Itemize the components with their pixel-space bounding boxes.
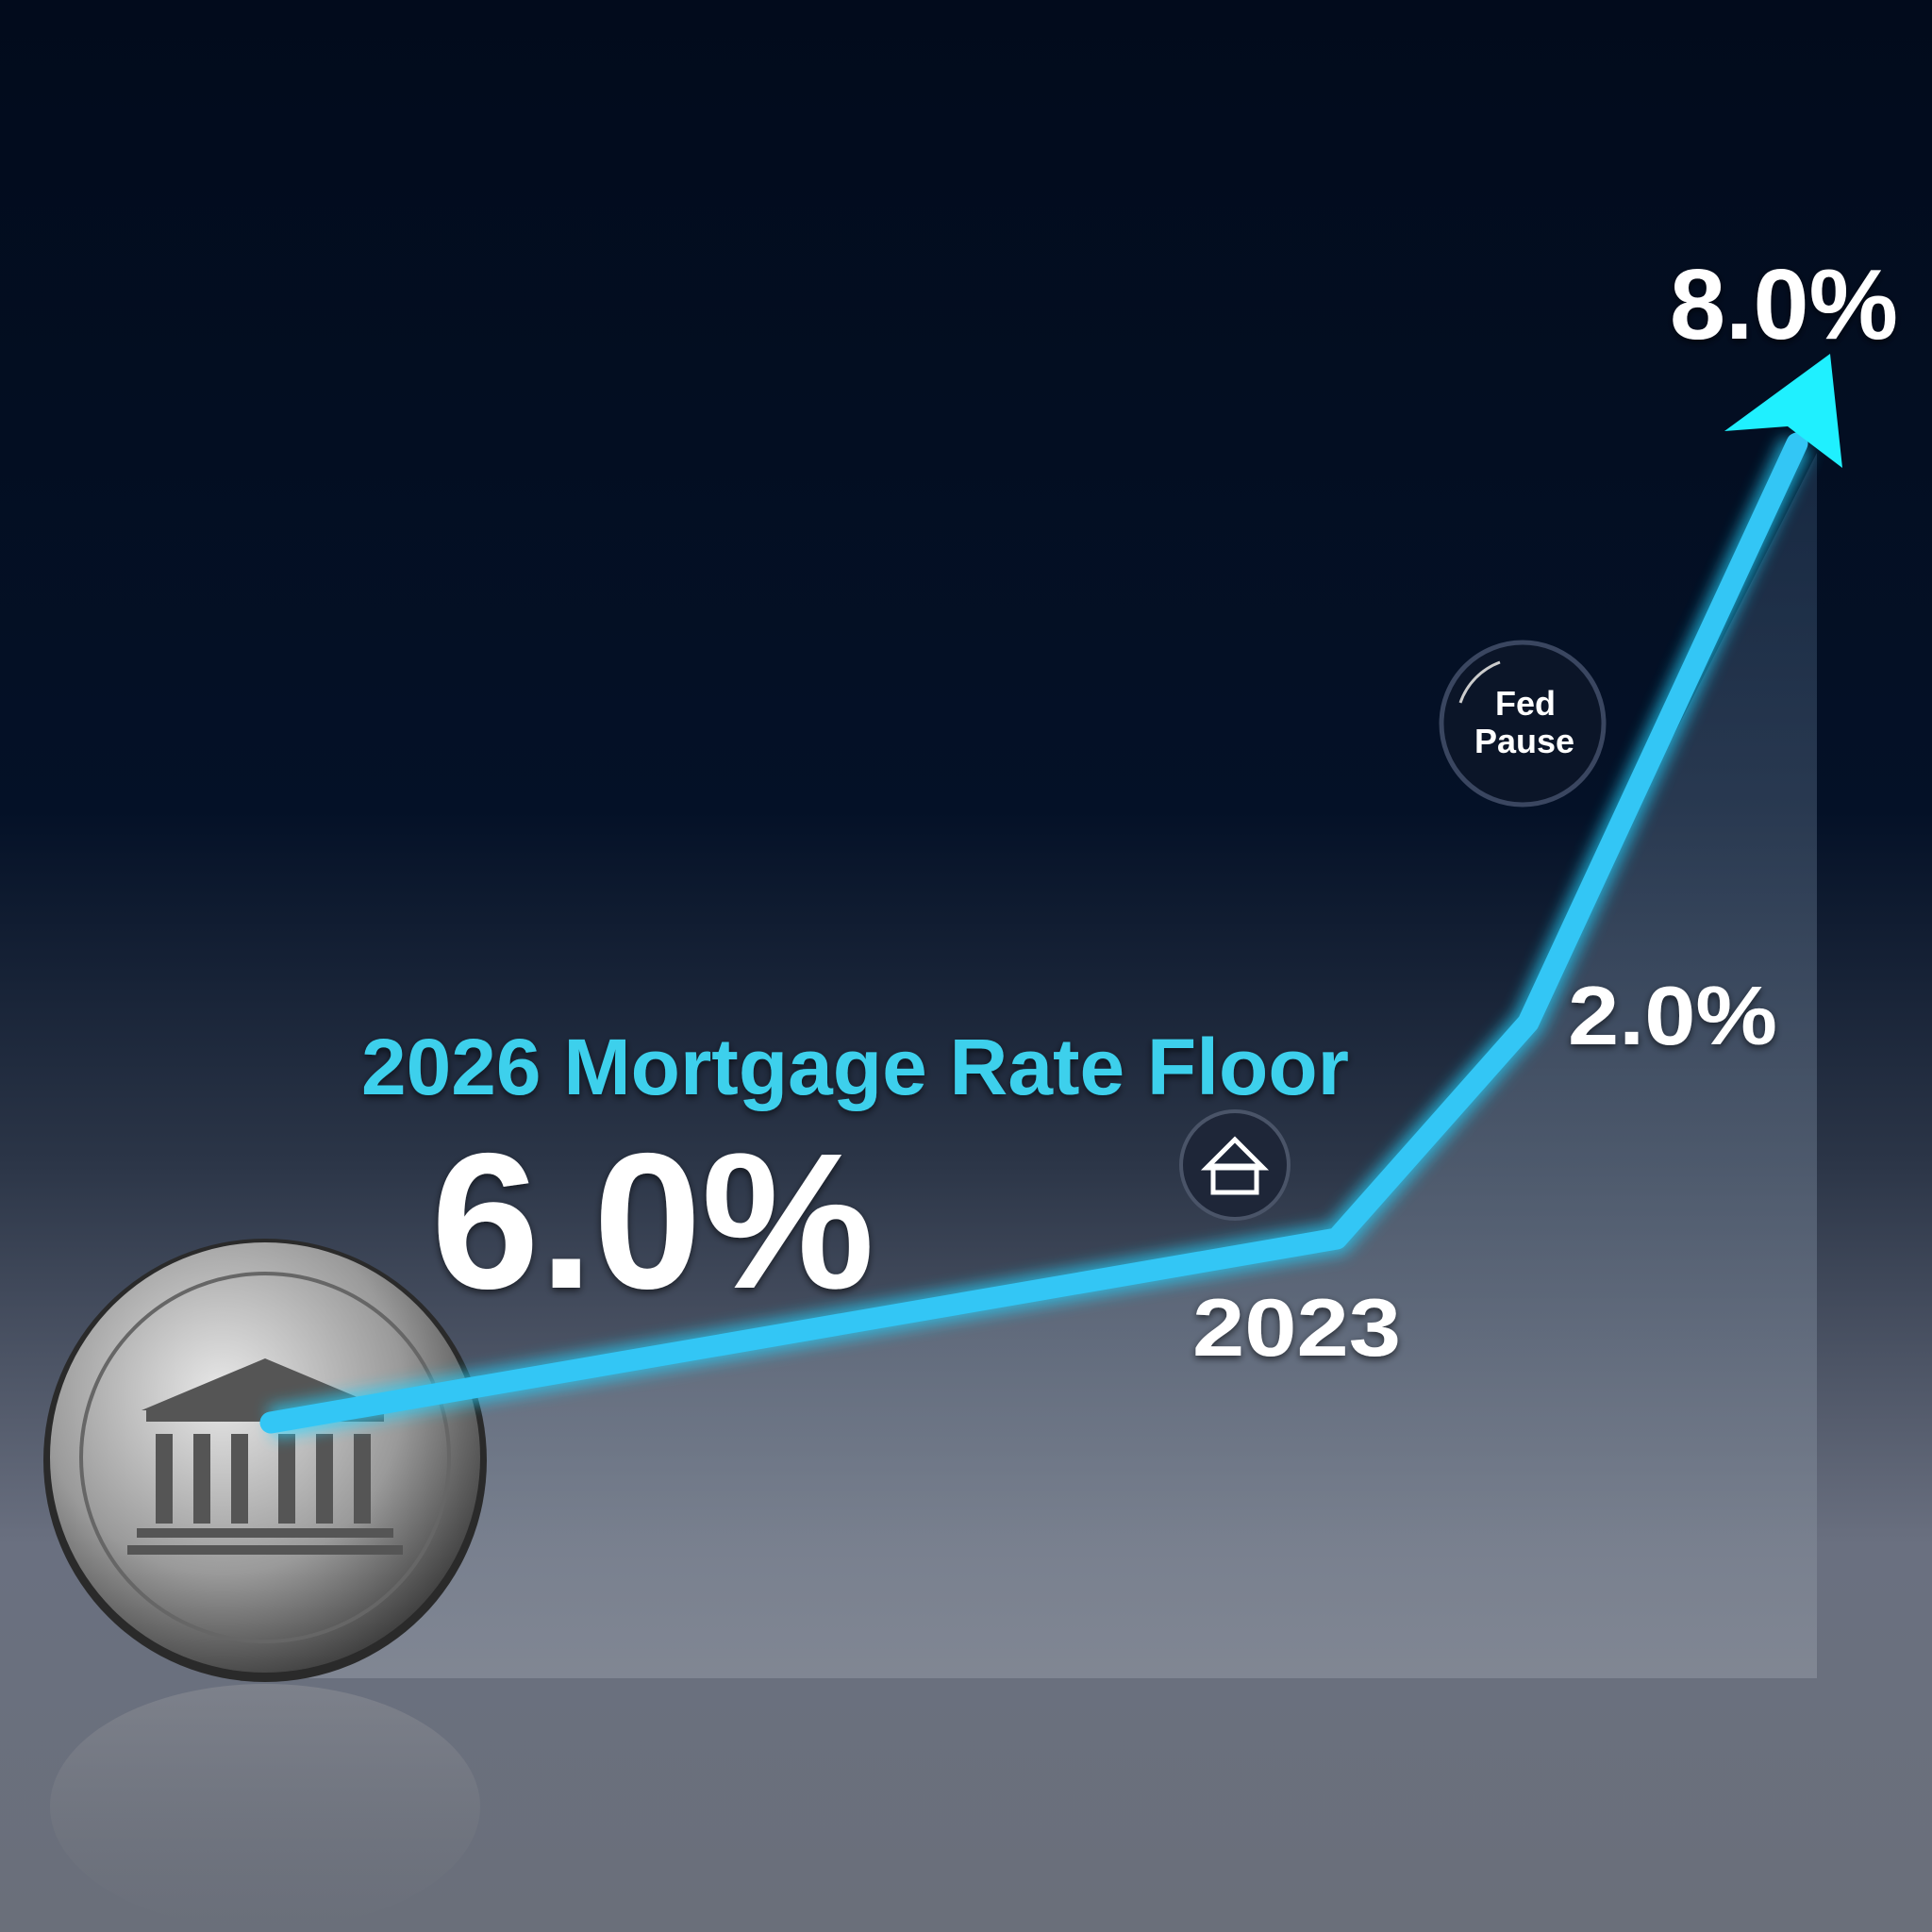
2023 label: 2023 (1192, 1283, 1401, 1374)
icon: fed pause badge (1441, 642, 1604, 805)
icon: house (1181, 1111, 1289, 1219)
title: 2026 Mortgage Rate Floor (361, 1023, 1349, 1111)
6.0% value: 6.0% (431, 1113, 874, 1329)
icon: fed pause badge: Fed (1495, 684, 1556, 723)
arrow head (1724, 354, 1842, 468)
8.0% label: 8.0% (1670, 249, 1898, 360)
icon: fed pause badge: Pause (1474, 722, 1574, 760)
coin (43, 1239, 487, 1682)
coin reflection (50, 1684, 480, 1929)
coin temple (127, 1358, 403, 1555)
chart area fill (271, 453, 1817, 1678)
2.0% label: 2.0% (1568, 969, 1777, 1062)
trend line (271, 443, 1797, 1423)
